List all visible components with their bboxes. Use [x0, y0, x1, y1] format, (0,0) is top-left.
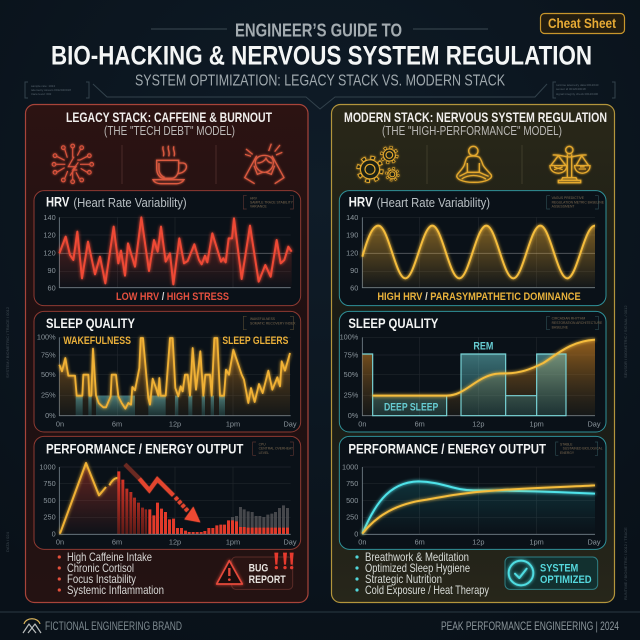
line: low HRV: [59, 217, 292, 284]
label: sleep gleers: SLEEP GLEERS: [222, 335, 288, 347]
note: SOMATIC RECOVERY INDEX: [250, 322, 296, 326]
panel: modern stack: [332, 104, 614, 602]
connector lines: signal integrity check 00120400: [556, 92, 598, 96]
y axis: 500: [43, 496, 56, 505]
list: modern practices: Optimized Sleep Hygiene: [365, 561, 470, 575]
line: caffeine spikes: [60, 463, 117, 534]
arrow: declining energy: [125, 464, 200, 522]
panel: legacy performance chart: [34, 436, 301, 549]
side notes: SYSTEM / BIOMETRIC / TRACE / 0012: [5, 306, 10, 378]
y axis: 60: [48, 284, 56, 293]
note: WAKEFULNESS: [250, 317, 276, 321]
chart title: [349, 195, 490, 210]
x axis: [56, 419, 297, 428]
chart title: (Heart Rate Variability): [73, 196, 187, 210]
x axis: 1pm: [226, 419, 240, 428]
y axis: 1000: [39, 462, 56, 471]
note: RESTORATION ARCHITECTURE: [552, 321, 603, 325]
y axis: 100%: [340, 333, 359, 342]
panel: modern performance chart: [339, 436, 606, 549]
list: legacy symptoms: Focus Instability: [67, 572, 136, 586]
gold area: [60, 463, 117, 534]
modern subheading: (THE "HIGH-PERFORMANCE" MODEL): [382, 123, 562, 138]
x axis: 12p: [472, 538, 484, 547]
x axis: 6m: [112, 419, 122, 428]
y axis: 750: [346, 479, 358, 488]
y axis: 60: [350, 284, 358, 293]
subtitle: SYSTEM OPTIMIZATION: LEGACY STACK VS. MODERN STACK: [135, 72, 505, 90]
connector lines: trace level: 002: [31, 92, 52, 96]
line: cyan energy: [362, 481, 595, 534]
badge: cheat sheet: Cheat Sheet: [548, 15, 616, 31]
y axis: [340, 333, 359, 420]
x axis: 12p: [169, 538, 181, 547]
x axis: Day: [283, 538, 297, 547]
x axis: 6m: [112, 538, 122, 547]
label: wakefulness: WAKEFULNESS: [63, 335, 131, 347]
note: STABLE: [560, 442, 573, 446]
legacy heading: LEGACY STACK: CAFFEINE & BURNOUT: [66, 109, 272, 125]
side notes: RUNTIME / BIOMETRIC / 0012 / TRACE: [623, 527, 628, 600]
note: [547, 196, 605, 209]
y axis: [37, 333, 56, 420]
label: deep sleep: DEEP SLEEP: [384, 402, 438, 414]
y axis: 250: [346, 513, 358, 522]
caption: LOW HRV / HIGH STRESS: [116, 291, 229, 303]
x axis: 1pm: [530, 538, 544, 547]
chart title: (Heart Rate Variability): [377, 196, 490, 210]
area under line: [59, 217, 292, 288]
x axis: 12p: [472, 419, 484, 428]
icon: stressed head: [245, 144, 284, 184]
note: ENERGY: [560, 451, 575, 455]
chart title: SLEEP QUALITY: [348, 315, 439, 331]
system label: SYSTEM: [540, 562, 578, 574]
report label: REPORT: [249, 574, 286, 586]
list: legacy symptoms: [58, 550, 164, 597]
connector lines: sample rate: 1024: [31, 84, 55, 88]
icon: brand mountain: [23, 619, 41, 633]
icon: coffee cup: [153, 146, 186, 184]
note: CPU: [259, 442, 266, 446]
icon: gears: [358, 147, 398, 181]
side notes: DATA / 024: [5, 531, 10, 552]
label: REM: REM: [473, 341, 493, 353]
chart title: PERFORMANCE / ENERGY OUTPUT: [348, 441, 546, 457]
bug label: BUG: [249, 562, 268, 574]
title: kicker: ENGINEER’S GUIDE TO: [235, 20, 402, 40]
icon: balance scale: [550, 146, 590, 183]
list: modern practices: Cold Exposure / Heat Therapy: [365, 583, 489, 597]
y axis: 0: [354, 530, 358, 539]
note: [556, 442, 603, 455]
list: modern practices: Breathwork & Meditation: [365, 550, 469, 564]
header: [51, 20, 592, 90]
x axis: [56, 538, 297, 547]
side notes: [5, 305, 628, 600]
y axis: 120: [346, 248, 358, 257]
note: BASELINE: [552, 325, 569, 329]
x axis: Day: [587, 538, 601, 547]
panel: legacy sleep chart: [34, 311, 301, 432]
icon: check circle: [509, 561, 533, 585]
line: high HRV wave: [362, 226, 595, 278]
list: legacy symptoms: High Caffeine Intake: [67, 550, 152, 564]
note: SUSTAINED BIOLOGICAL: [563, 447, 603, 451]
y axis: 500: [346, 496, 358, 505]
connector lines: telemetry stream 0012040018: [31, 88, 71, 92]
chart title: PERFORMANCE / ENERGY OUTPUT: [46, 441, 244, 457]
y axis: [346, 213, 358, 293]
note: VARIANCE: [250, 205, 268, 209]
area under wave: [362, 226, 595, 288]
x axis: 6m: [415, 419, 425, 428]
legacy subheading: (THE "TECH DEBT" MODEL): [104, 123, 235, 138]
x axis: Day: [587, 419, 601, 428]
y axis: 250: [43, 513, 56, 522]
gold area: [362, 340, 595, 416]
x axis: [358, 538, 601, 547]
y axis: 25%: [344, 391, 359, 400]
area under curves: [362, 481, 595, 534]
callout: bug report: [217, 553, 294, 589]
gold area: [59, 338, 290, 416]
chart title: SLEEP QUALITY: [46, 315, 136, 331]
grey recovery bars: [231, 505, 289, 534]
y axis: 75%: [41, 350, 56, 359]
x axis: 12p: [169, 419, 181, 428]
note: ASSESSMENT: [552, 205, 574, 209]
y axis: 0%: [45, 411, 56, 420]
optimized label: OPTIMIZED: [540, 574, 592, 586]
chart title: [46, 195, 187, 210]
panel: modern HRV chart: [339, 191, 606, 306]
line: gold energy: [362, 485, 595, 534]
note: VAGUS PREDICTIVE: [552, 196, 585, 200]
badge: cheat sheet: [540, 14, 624, 34]
y axis: 120: [43, 231, 56, 240]
note: LEVEL: [259, 451, 269, 455]
y axis: 75%: [344, 350, 359, 359]
note: REGULATION METRIC BASELINE: [552, 200, 605, 204]
y axis: [43, 213, 56, 293]
list: legacy symptoms: Chronic Cortisol: [67, 561, 134, 575]
y axis: 90: [350, 266, 358, 275]
faded red bars: [117, 471, 147, 534]
note: [547, 316, 603, 330]
note: SAMPLE TRACE STABILITY: [250, 201, 294, 205]
x axis: 1pm: [530, 419, 544, 428]
icon: warning triangle: [217, 561, 242, 584]
x axis: 0n: [56, 419, 64, 428]
x axis: 1pm: [226, 538, 240, 547]
y axis: 190: [346, 231, 358, 240]
note: CIRCADIAN RHYTHM: [552, 317, 585, 321]
sleep stage bars: [373, 354, 566, 416]
footer: [0, 612, 640, 633]
chart title: HRV: [349, 195, 373, 210]
y axis: [39, 462, 56, 539]
x axis: Day: [283, 419, 297, 428]
panel: modern sleep chart: [339, 311, 606, 432]
y axis: 120: [43, 248, 56, 257]
list: modern practices: Strategic Nutrition: [365, 572, 442, 586]
y axis: 90: [48, 266, 56, 275]
y axis: 100%: [37, 333, 56, 342]
note: CENTRAL OVERHEAT: [259, 447, 293, 451]
note: HRV: [250, 197, 258, 201]
connector lines: [25, 82, 615, 109]
note: [243, 316, 296, 330]
icon: meditation: [457, 146, 492, 182]
y axis: 140: [346, 213, 358, 222]
y axis: 0%: [348, 411, 359, 420]
y axis: 1000: [342, 462, 358, 471]
chart title: HRV: [46, 195, 70, 210]
deep sleep bars: [76, 396, 225, 416]
y axis: 750: [43, 479, 56, 488]
line: sleep progression: [373, 340, 595, 396]
note: [253, 442, 293, 455]
list: legacy symptoms: Systemic Inflammation: [67, 583, 164, 597]
exclamation marks: [274, 553, 294, 569]
connector lines: runtime telemetry data 0012040: [556, 83, 599, 87]
y axis: 140: [43, 213, 56, 222]
y axis: 50%: [41, 370, 56, 379]
y axis: 50%: [344, 370, 359, 379]
list: modern practices: [355, 550, 489, 597]
icon: neural circuit: [52, 144, 93, 183]
x axis: 0n: [358, 538, 366, 547]
x axis: 0n: [358, 419, 366, 428]
y axis: 0: [52, 530, 56, 539]
caption: HIGH HRV / PARASYMPATHETIC DOMINANCE: [377, 291, 581, 303]
callout: system optimized: [505, 557, 598, 589]
x axis: [358, 419, 601, 428]
panel: legacy HRV chart: [34, 191, 301, 306]
line: fragmented sleep: [59, 338, 290, 409]
connector lines: sensor id 0012040018: [556, 87, 586, 91]
y axis: 25%: [41, 391, 56, 400]
side notes: SENSOR / BIOMETRIC / SIGNAL / 0012: [623, 305, 628, 378]
note: [243, 196, 294, 209]
bright red bars: [148, 503, 289, 534]
x axis: 0n: [56, 538, 64, 547]
brand name: FICTIONAL ENGINEERING BRAND: [45, 619, 182, 633]
x axis: 6m: [415, 538, 425, 547]
y axis: [342, 462, 358, 539]
